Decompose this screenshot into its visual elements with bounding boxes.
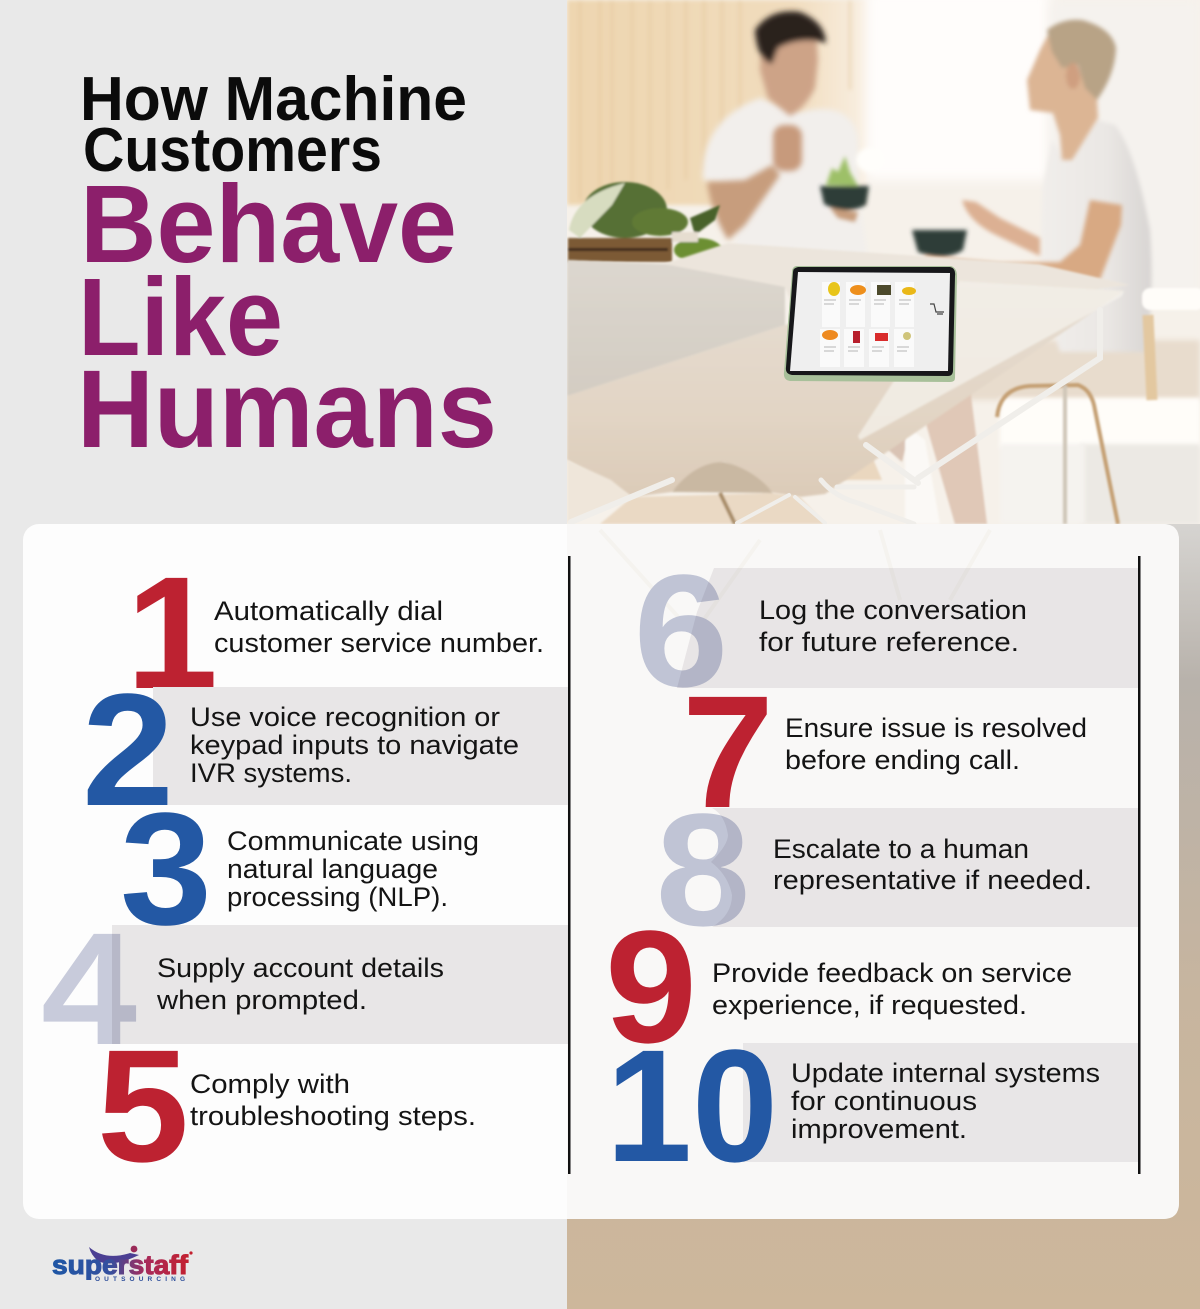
step 8: representative if needed.: [773, 865, 1092, 895]
lower right photo continuation: [567, 524, 1200, 1309]
woman: [912, 20, 1152, 352]
bowl and greens: [820, 156, 869, 222]
step 7: 7: [682, 662, 774, 841]
step 2: 2: [82, 660, 174, 839]
step 4: Supply account details: [157, 953, 444, 983]
step 8: 8: [656, 780, 750, 959]
step 10: [606, 1016, 1138, 1195]
step 3: [120, 779, 479, 958]
icon: tablet showing grocery shop: [784, 266, 957, 382]
logo: superstaff outsourcing: OUTSOURCING: [95, 1276, 185, 1283]
step 3: processing (NLP).: [227, 882, 448, 912]
step 1: 1: [126, 543, 218, 722]
title: How Machine: [80, 65, 467, 134]
title: Customers: [83, 116, 382, 185]
step 5: Comply with: [190, 1069, 350, 1099]
step 9: 9: [605, 897, 697, 1076]
step 1: [126, 543, 544, 722]
step 5: troubleshooting steps.: [190, 1101, 476, 1131]
legs and stool under the table: [829, 288, 1200, 524]
divider lines: [568, 556, 1140, 1174]
step 8: Escalate to a human: [773, 834, 1029, 864]
step 2: Use voice recognition or: [190, 702, 500, 732]
step 3: natural language: [227, 854, 438, 884]
step 2: keypad inputs to navigate: [190, 730, 519, 760]
step 7: [682, 662, 1087, 841]
step 5: 5: [97, 1016, 189, 1195]
step 2: [82, 660, 568, 839]
step 10: for continuous: [791, 1086, 977, 1116]
step 6: [634, 541, 1138, 720]
table: [567, 243, 1130, 497]
step 9: experience, if requested.: [712, 990, 1027, 1020]
step 4: 4: [41, 899, 137, 1078]
step 3: Communicate using: [227, 826, 479, 856]
title: Like: [78, 256, 283, 379]
step 4: when prompted.: [156, 985, 367, 1015]
logo: superstaff outsourcing: superstaff: [52, 1250, 189, 1280]
step 7: before ending call.: [785, 745, 1020, 775]
white wall glow: [856, 150, 868, 170]
step 6: Log the conversation: [759, 595, 1027, 625]
step 1: Automatically dial: [214, 596, 443, 626]
left background panel: [0, 0, 567, 1309]
step 10: 10: [606, 1016, 778, 1195]
beige stool seat, cushion and floor: [567, 460, 825, 524]
step 10: improvement.: [791, 1114, 967, 1144]
step 6: 6: [634, 541, 728, 720]
transparent white chair legs: [568, 350, 1103, 524]
step 5: [97, 1016, 476, 1195]
bright window: [866, 0, 1051, 180]
step 9: [605, 897, 1072, 1076]
man: [703, 11, 869, 260]
wood panel wall: [567, 0, 867, 205]
title: Humans: [77, 348, 497, 471]
step 6: for future reference.: [759, 627, 1019, 657]
floor area: [960, 340, 1200, 400]
step 8: [656, 780, 1138, 959]
title: [77, 65, 497, 471]
title: Behave: [80, 163, 457, 286]
step 9: Provide feedback on service: [712, 958, 1072, 988]
step 3: 3: [120, 779, 212, 958]
step 2: IVR systems.: [190, 758, 352, 788]
photo: couple at a table with a tablet showing online grocery: [567, 0, 1200, 524]
step 4: [41, 899, 568, 1078]
vegetables in a crate: [568, 182, 722, 262]
step 10: Update internal systems: [791, 1058, 1100, 1088]
main card: [23, 524, 1179, 1219]
step 1: customer service number.: [214, 628, 544, 658]
step 7: Ensure issue is resolved: [785, 713, 1087, 743]
